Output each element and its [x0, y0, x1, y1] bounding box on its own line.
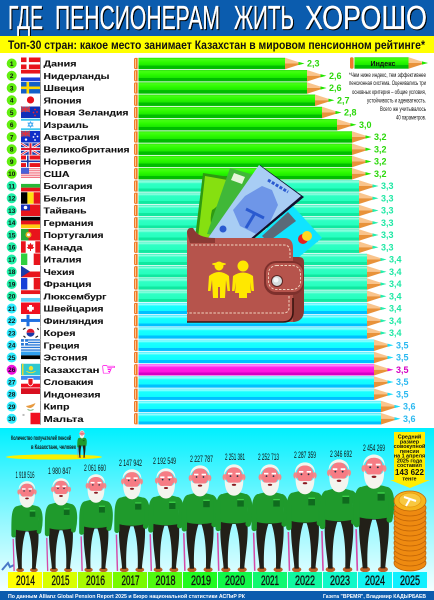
column 2017 — [113, 458, 147, 588]
column 2022 — [288, 450, 322, 588]
callout: average pension arrow: на 1 апреля — [394, 454, 425, 460]
row 23 Корея: 23 — [8, 330, 16, 337]
row 10 США: США — [44, 170, 70, 179]
flag Italy — [21, 254, 41, 266]
callout: average pension arrow: 2025 года — [397, 458, 423, 464]
column 2024 — [356, 443, 392, 588]
row 5 Новая Зеландия: Новая Зеландия — [44, 108, 129, 118]
row 13 Тайвань: 13 — [8, 208, 16, 215]
column 2022: 2 287 359 — [294, 450, 316, 460]
row 7 Австралия: 7 — [10, 134, 14, 141]
row 6 Израиль: Израиль — [44, 121, 89, 130]
callout: average pension arrow: размер — [400, 440, 420, 446]
row 30 Мальта — [7, 413, 416, 425]
row 8 Великобритания: 3,2 — [374, 144, 387, 154]
row 24 Греция: 3,5 — [396, 340, 409, 350]
row 22 Финляндия: 22 — [8, 318, 16, 325]
column 2021 — [253, 452, 287, 588]
row 17 Италия — [7, 254, 402, 266]
row 14 Германия — [7, 217, 394, 229]
row 9 Норвегия: Норвегия — [44, 158, 92, 166]
column 2014 — [8, 470, 42, 588]
row 13 Тайвань — [7, 204, 394, 216]
flag Taiwan — [21, 204, 41, 216]
row 23 Корея — [7, 327, 402, 339]
row 5 Новая Зеландия: 2,8 — [344, 108, 357, 118]
row 1 Дания: Дания — [44, 60, 77, 68]
column 2018 — [148, 456, 182, 588]
row 26 Казахстан: 26 — [8, 367, 16, 374]
row 3 Швеция: 2,6 — [329, 83, 342, 93]
row 13 Тайвань: Тайвань — [44, 206, 87, 216]
row 24 Греция — [7, 339, 409, 351]
row 28 Индонезия — [7, 388, 409, 400]
legend pencil: Индекс — [371, 61, 396, 68]
title — [8, 0, 427, 37]
title: ЖИТЬ — [234, 0, 294, 37]
flag Slovakia — [21, 376, 41, 388]
flag Australia — [21, 131, 41, 143]
row 30 Мальта: 3,6 — [403, 414, 416, 424]
row 25 Эстония: Эстония — [44, 354, 88, 362]
row 20 Люксембург: Люксембург — [44, 292, 107, 301]
column 2015: 2015 — [52, 572, 70, 588]
column 2022: 2022 — [295, 572, 315, 588]
row 21 Швейцария — [7, 302, 402, 314]
row 3 Швеция: Швеция — [44, 84, 85, 93]
row 3 Швеция — [7, 82, 342, 94]
column 2015 — [43, 466, 77, 588]
legend note — [349, 72, 426, 122]
row 28 Индонезия: Индонезия — [44, 390, 101, 399]
legend: index pencil and note — [349, 57, 428, 121]
row 4 Япония: Япония — [44, 96, 82, 105]
flag Finland — [21, 315, 41, 327]
row 26 Казахстан — [7, 360, 409, 380]
column 2017: 2 147 942 — [119, 458, 142, 468]
row 5 Новая Зеландия — [7, 106, 357, 118]
row 6 Израиль — [7, 119, 372, 131]
flag Malta — [21, 413, 41, 425]
row 23 Корея: Корея — [44, 329, 76, 338]
row 10 США: 3,2 — [374, 169, 387, 179]
title: ГДЕ — [8, 0, 43, 37]
row 19 Франция — [7, 278, 402, 290]
flag Denmark — [21, 58, 41, 70]
row 7 Австралия: Австралия — [44, 133, 100, 142]
row 29 Кипр — [7, 400, 416, 412]
row 2 Нидерланды — [7, 70, 342, 82]
flag Estonia — [21, 352, 41, 364]
row 21 Швейцария: 3,4 — [389, 304, 402, 314]
callout: average pension arrow: составил — [397, 463, 423, 469]
row 26 Казахстан: Казахстан — [44, 366, 100, 375]
row 25 Эстония: 3,5 — [396, 352, 409, 362]
row 20 Люксембург: 3,4 — [389, 291, 402, 301]
row 16 Канада — [7, 241, 394, 253]
icon: pointing hand: ☞ — [101, 360, 116, 380]
row 6 Израиль: 3,0 — [359, 120, 372, 130]
icon: wallet with banknotes and card — [187, 165, 322, 322]
row 9 Норвегия: 9 — [10, 159, 14, 166]
flag Israel — [21, 119, 41, 131]
row 27 Словакия: Словакия — [44, 378, 94, 387]
flag New Zealand — [21, 106, 41, 118]
row 18 Чехия: Чехия — [44, 268, 75, 277]
row 22 Финляндия: 3,4 — [389, 316, 402, 326]
wallet clasp — [264, 261, 304, 295]
caption with small pensioner: в Казахстане, человек — [31, 444, 77, 451]
blue banknote — [208, 165, 304, 241]
row 23 Корея: 3,4 — [389, 328, 402, 338]
icon: coin stack — [394, 491, 426, 571]
callout: average pension arrow: пенсии — [400, 449, 419, 455]
flag Germany — [21, 217, 41, 229]
row 29 Кипр: Кипр — [44, 402, 70, 412]
column 2018: 2018 — [156, 572, 176, 588]
row 15 Португалия: 15 — [8, 232, 16, 239]
row 8 Великобритания: 8 — [10, 147, 14, 154]
flag Greece — [21, 339, 41, 351]
row 19 Франция: Франция — [44, 280, 92, 289]
column 2020 — [218, 452, 252, 588]
row 28 Индонезия: 28 — [8, 392, 16, 399]
row 3 Швеция: 3 — [10, 85, 14, 92]
row 2 Нидерланды: 2 — [10, 73, 14, 80]
row 14 Германия: Германия — [44, 219, 94, 228]
row 24 Греция: 24 — [8, 343, 16, 350]
source text: По данным Allianz Global Pension Report 2025 и Бюро национальной статистики АСПиР РК — [8, 593, 246, 600]
column 2020: 2 251 381 — [225, 452, 245, 462]
row 29 Кипр: 29 — [8, 404, 16, 411]
row 19 Франция: 3,4 — [389, 279, 402, 289]
icon: elderly couple — [208, 260, 254, 298]
row 1 Дания: 1 — [10, 61, 14, 68]
row 25 Эстония — [7, 352, 409, 364]
flag Portugal — [21, 229, 41, 241]
row 12 Бельгия: 3,3 — [381, 193, 394, 203]
row 20 Люксембург — [7, 290, 402, 302]
column 2019: 2 227 787 — [190, 454, 213, 464]
row 19 Франция: 19 — [8, 281, 16, 288]
icon: signature mark — [2, 563, 14, 570]
row 2 Нидерланды: 2,6 — [329, 71, 342, 81]
column 2025: 2025 — [400, 572, 420, 588]
callout: average pension arrow: Средний — [398, 434, 421, 440]
row 8 Великобритания — [7, 143, 387, 155]
row 30 Мальта: 30 — [8, 416, 16, 423]
header band — [0, 0, 434, 37]
row 10 США — [7, 168, 387, 180]
row 18 Чехия — [7, 266, 402, 278]
row 25 Эстония: 25 — [8, 355, 16, 362]
flag Japan — [21, 94, 41, 106]
flag UK — [21, 143, 41, 155]
flag Netherlands — [21, 70, 41, 82]
row 13 Тайвань: 3,3 — [381, 206, 394, 216]
row 17 Италия: Италия — [44, 256, 82, 264]
column 2021: 2 252 713 — [258, 452, 279, 462]
flag Canada — [21, 241, 41, 253]
column 2023 — [322, 449, 357, 588]
column 2024: 2 454 269 — [363, 443, 385, 453]
row 6 Израиль: 6 — [10, 122, 14, 129]
callout: average pension arrow: совокупной — [394, 443, 425, 450]
row 14 Германия: 14 — [8, 220, 16, 227]
row 17 Италия: 3,4 — [389, 254, 402, 264]
row 16 Канада: 16 — [8, 245, 16, 252]
row 21 Швейцария: 21 — [8, 306, 16, 313]
row 4 Япония: 4 — [10, 98, 14, 105]
row 1 Дания: 2,3 — [307, 58, 320, 68]
flag Switzerland — [21, 302, 41, 314]
caption with small pensioner: Количество получателей пенсий — [11, 434, 71, 442]
column 2016: 2016 — [86, 572, 105, 588]
panel: pensioners by year — [0, 428, 434, 591]
row 11 Болгария: Болгария — [44, 182, 93, 191]
column 2014: 2014 — [16, 572, 35, 588]
flag Czechia — [21, 266, 41, 278]
row 12 Бельгия — [7, 192, 394, 204]
wallet back — [280, 257, 304, 322]
row 16 Канада: 3,3 — [381, 242, 394, 252]
row 4 Япония: 2,7 — [337, 95, 350, 105]
column 2018: 2 192 549 — [153, 456, 176, 466]
wallet body — [187, 228, 293, 322]
column 2023: 2 346 692 — [330, 449, 352, 459]
callout: average pension arrow — [390, 432, 430, 488]
green banknote — [195, 173, 236, 238]
row 15 Португалия — [7, 229, 394, 241]
flag USA — [21, 168, 41, 180]
row 9 Норвегия: 3,2 — [374, 156, 387, 166]
caption with small pensioner — [6, 430, 102, 460]
row 29 Кипр: 3,6 — [403, 402, 416, 412]
row 8 Великобритания: Великобритания — [44, 145, 130, 154]
flag France — [21, 278, 41, 290]
column 2020: 2020 — [225, 572, 245, 588]
flag Kazakhstan — [21, 364, 41, 376]
row 4 Япония — [7, 94, 350, 106]
flag Norway — [21, 156, 41, 168]
row 20 Люксембург: 20 — [8, 294, 16, 301]
row 27 Словакия: 3,5 — [396, 377, 409, 387]
column 2016: 2 061 660 — [84, 463, 106, 473]
row 1 Дания — [7, 58, 320, 70]
flag Belgium — [21, 192, 41, 204]
row 2 Нидерланды: Нидерланды — [44, 72, 110, 81]
column 2021: 2021 — [261, 572, 279, 588]
column 2023: 2023 — [330, 572, 350, 588]
column 2017: 2017 — [122, 572, 140, 588]
row 12 Бельгия: 12 — [8, 196, 16, 203]
footer band — [0, 591, 434, 600]
row 27 Словакия: 27 — [8, 379, 16, 386]
row 11 Болгария — [7, 180, 394, 192]
row 16 Канада: Канада — [44, 243, 83, 252]
row 17 Италия: 17 — [8, 257, 16, 264]
flag Bulgaria — [21, 180, 41, 192]
row 9 Норвегия — [7, 156, 387, 168]
row 12 Бельгия: Бельгия — [44, 194, 86, 203]
flag Indonesia — [21, 388, 41, 400]
row 21 Швейцария: Швейцария — [44, 304, 104, 314]
row 24 Греция: Греция — [44, 341, 80, 350]
row 7 Австралия: 3,2 — [374, 132, 387, 142]
column 2019 — [183, 454, 217, 588]
row 5 Новая Зеландия: 5 — [10, 110, 14, 117]
row 7 Австралия — [7, 131, 387, 143]
row 11 Болгария: 11 — [8, 183, 16, 190]
credit card — [256, 206, 322, 262]
title: ПЕНСИОНЕРАМ — [55, 0, 220, 37]
column 2016 — [78, 463, 112, 588]
flag Luxembourg — [21, 290, 41, 302]
row 14 Германия: 3,3 — [381, 218, 394, 228]
row 22 Финляндия — [7, 315, 402, 327]
row 27 Словакия — [7, 376, 409, 388]
second green banknote — [207, 168, 254, 238]
column 2019: 2019 — [191, 572, 211, 588]
callout: average pension arrow: тенге — [402, 476, 417, 482]
row 26 Казахстан: 3,5 — [396, 365, 409, 375]
column 2015: 1 980 847 — [48, 466, 71, 476]
flag Korea — [21, 327, 41, 339]
row 22 Финляндия: Финляндия — [44, 317, 104, 326]
column 2014: 1 918 516 — [16, 470, 34, 480]
flag Sweden — [21, 82, 41, 94]
row 15 Португалия: Португалия — [44, 231, 104, 240]
row 10 США: 10 — [8, 171, 16, 178]
row 18 Чехия: 18 — [8, 269, 16, 276]
callout: average pension arrow: 143 622 — [395, 468, 425, 477]
row 11 Болгария: 3,3 — [381, 181, 394, 191]
row 28 Индонезия: 3,5 — [396, 389, 409, 399]
row 30 Мальта: Мальта — [44, 415, 84, 424]
column 2024: 2024 — [365, 572, 385, 588]
flag Cyprus — [21, 400, 41, 412]
row 15 Португалия: 3,3 — [381, 230, 394, 240]
row 18 Чехия: 3,4 — [389, 267, 402, 277]
